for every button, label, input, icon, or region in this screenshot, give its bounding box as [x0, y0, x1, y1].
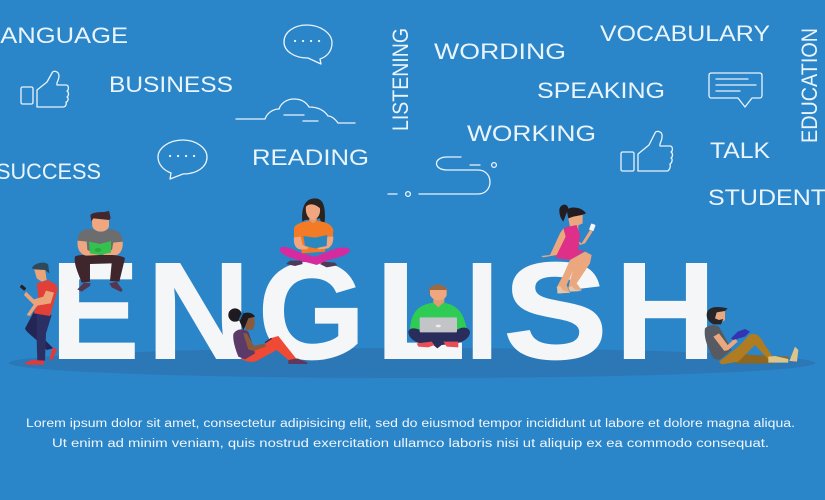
letter L: L [375, 234, 466, 388]
figure: man in dark shirt reading blue book [705, 307, 798, 364]
figure: woman in pink with phone [541, 205, 596, 293]
word: STUDENT: STUDENT [708, 185, 825, 210]
letter H: H [615, 234, 716, 388]
figure: man in red standing with phone [20, 263, 58, 365]
line icons [21, 25, 762, 196]
letter I: I [465, 234, 499, 388]
figure: woman in orange with blue book [279, 198, 350, 267]
word: SPEAKING: SPEAKING [537, 78, 665, 103]
icon: winding path [388, 157, 496, 196]
word: TALK: TALK [710, 138, 770, 163]
icon: thumbs up right [621, 131, 672, 171]
word: EDUCATION: EDUCATION [797, 28, 822, 143]
footer line 1: Lorem ipsum dolor sit amet, consectetur adipisicing elit, sed do eiusmod tempor incididunt ut labore et dolore magna aliqua. [26, 418, 795, 430]
ground shadow [9, 348, 815, 378]
letter S: S [503, 234, 608, 388]
figure: man in grey with green book [75, 211, 125, 292]
icon: speech bubble top [284, 25, 332, 64]
figure: woman in purple sitting with phone [228, 308, 307, 364]
letter G: G [258, 234, 366, 388]
icon: message box [709, 73, 762, 107]
icon: speech bubble lower [158, 140, 207, 179]
letter N: N [146, 234, 250, 388]
figure: man in green with laptop [408, 285, 470, 348]
word: VOCABULARY: VOCABULARY [600, 21, 770, 46]
footer text [26, 418, 795, 450]
letter E: E [50, 234, 140, 388]
word: BUSINESS: BUSINESS [109, 72, 233, 97]
word: WORDING: WORDING [434, 39, 566, 64]
word cloud [0, 21, 825, 210]
word: WORKING: WORKING [467, 121, 596, 146]
icon: cloud [236, 99, 355, 123]
icon: thumbs up left [21, 71, 68, 107]
title: ENGLISH letters [50, 234, 716, 388]
footer line 2: Ut enim ad minim veniam, quis nostrud exercitation ullamco laboris nisi ut aliquip ex ea commodo consequat. [52, 438, 769, 450]
word: READING: READING [252, 145, 369, 170]
word: LISTENING: LISTENING [388, 28, 413, 131]
